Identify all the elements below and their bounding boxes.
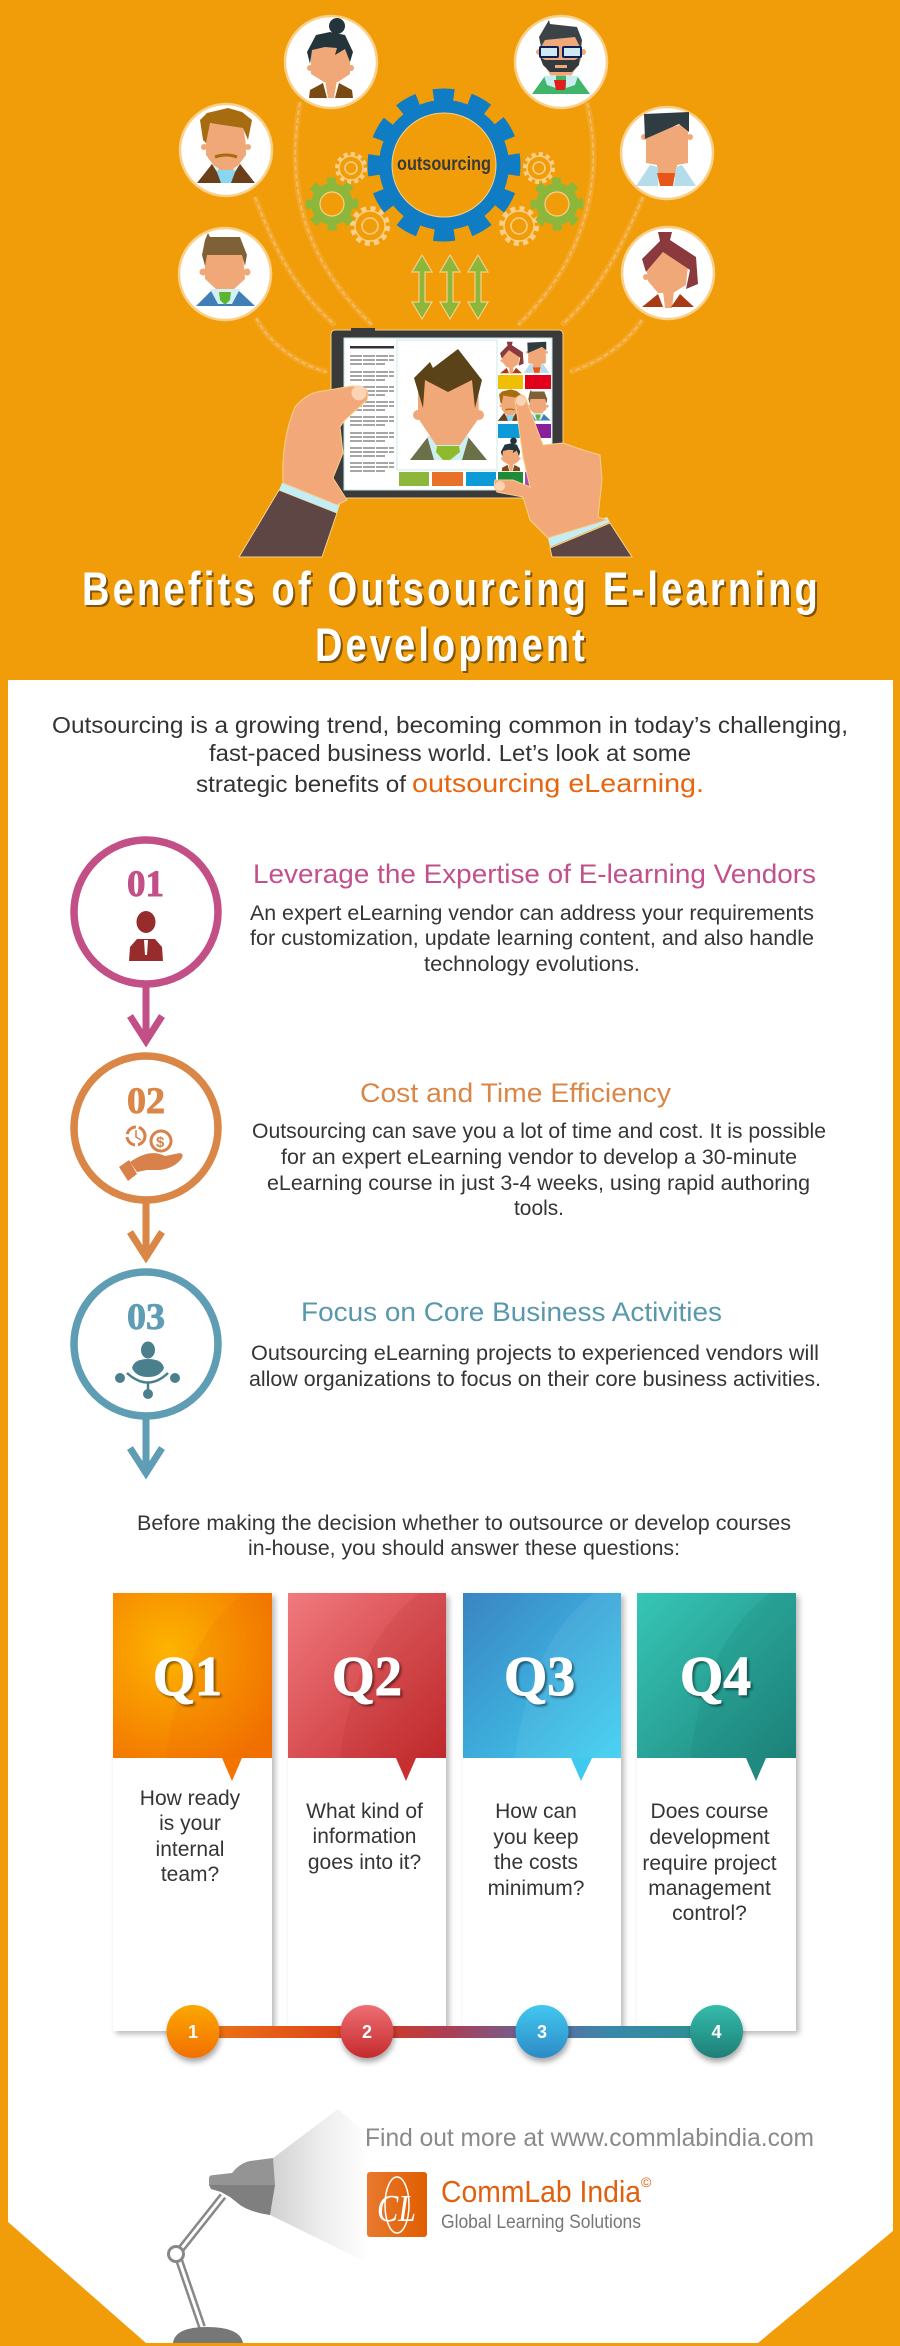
- step 01 body: [250, 902, 814, 976]
- card Q2: goes into it?: [308, 1851, 421, 1874]
- title: Development: [315, 618, 588, 671]
- intro text: Outsourcing is a growing trend, becoming common in today’s challenging,: [52, 712, 848, 738]
- logo: CommLab India: CommLab India: [441, 2174, 642, 2209]
- card Q3: minimum?: [488, 1877, 584, 1900]
- card Q2: Q2: [332, 1646, 402, 1708]
- step 01 body: An expert eLearning vendor can address your requirements: [250, 902, 814, 925]
- card Q4: [637, 1593, 796, 2031]
- small orange gears: [337, 154, 553, 244]
- intro text: strategic benefits of: [196, 771, 407, 797]
- step 01 body: technology evolutions.: [424, 953, 640, 976]
- hero illustration: [179, 16, 714, 557]
- card Q2: What kind of: [306, 1800, 423, 1823]
- green gear right: [534, 181, 580, 227]
- intro text: outsourcing eLearning.: [412, 768, 704, 798]
- step 03 number: 03: [127, 1297, 165, 1338]
- tablet mini portraits: [500, 342, 524, 374]
- card Q4: control?: [672, 1902, 747, 1925]
- step 03 body: [249, 1342, 821, 1391]
- step 01 number: 01: [127, 864, 164, 905]
- tablet colour tiles: [399, 472, 429, 486]
- person: man with moustache: [180, 104, 272, 196]
- icon: business person: [129, 911, 163, 961]
- step 03 body: allow organizations to focus on their core business activities.: [249, 1368, 821, 1391]
- tablet: [331, 328, 563, 498]
- timeline node 2: 2: [362, 2022, 372, 2042]
- timeline node 3: [516, 2005, 568, 2058]
- logo: CommLab India: CL: [377, 2188, 416, 2230]
- step 01 body: for customization, update learning content, and also handle: [250, 927, 814, 950]
- timeline node 4: 4: [711, 2022, 722, 2042]
- find out more text: Find out more at www.commlabindia.com: [365, 2124, 814, 2152]
- right hand: [494, 395, 632, 557]
- card Q1: is your: [159, 1812, 221, 1835]
- timeline node 3: 3: [537, 2022, 547, 2042]
- icon: person with network nodes: [115, 1342, 180, 1399]
- tablet main portrait: [410, 349, 487, 460]
- white content panel: [8, 680, 893, 2343]
- questions intro text: Before making the decision whether to outsource or develop courses: [137, 1512, 791, 1535]
- lamp light beam: [270, 2109, 368, 2263]
- questions intro text: [137, 1512, 791, 1560]
- card Q1: team?: [161, 1863, 219, 1886]
- dashed connector curves: [255, 102, 643, 372]
- card Q1: Q1: [153, 1646, 222, 1708]
- step 01: [74, 840, 816, 1041]
- step 03: [74, 1272, 821, 1473]
- step 02 ring and arrow: [74, 1056, 218, 1257]
- card Q3: Q3: [504, 1646, 575, 1708]
- timeline node 4: [690, 2005, 743, 2058]
- step 03 body: Outsourcing eLearning projects to experienced vendors will: [251, 1342, 819, 1365]
- timeline node 1: 1: [188, 2022, 198, 2042]
- person: man with glasses and beard: [515, 16, 607, 108]
- intro text: [52, 712, 848, 798]
- card Q1: [113, 1593, 272, 2031]
- card Q4: require project: [642, 1852, 777, 1875]
- person: man in blue suit: [179, 228, 271, 320]
- left hand: [239, 386, 368, 557]
- card Q2: information: [313, 1825, 416, 1848]
- card Q4: development: [649, 1826, 770, 1849]
- card Q1: How ready: [140, 1787, 241, 1810]
- logo: CommLab India: ©: [641, 2174, 652, 2190]
- card Q4: management: [648, 1877, 771, 1900]
- step 03 ring and arrow: [74, 1272, 218, 1473]
- step 02 body: for an expert eLearning vendor to develop a 30-minute: [281, 1146, 797, 1169]
- step 02 body: Outsourcing can save you a lot of time and cost. It is possible: [252, 1120, 826, 1143]
- double-headed green arrows: [412, 255, 488, 319]
- step 01 ring and arrow: [74, 840, 218, 1041]
- icon: hand with clock and coin: $: [156, 1134, 165, 1151]
- person: man with dark hair: [621, 107, 713, 199]
- card Q4: Q4: [680, 1646, 751, 1708]
- icon: hand with clock and coin: [119, 1127, 183, 1181]
- step 02 body: [252, 1120, 826, 1220]
- desk lamp: [168, 2109, 368, 2343]
- timeline node 2: [340, 2005, 394, 2058]
- card Q3: the costs: [494, 1851, 578, 1874]
- logo: CommLab India: [367, 2172, 652, 2237]
- card Q3: How can: [495, 1800, 577, 1823]
- numbered timeline: [166, 2005, 743, 2058]
- person: woman with bun: [285, 16, 377, 108]
- step 02 body: tools.: [514, 1197, 564, 1220]
- bottom corner triangles: [0, 2216, 900, 2346]
- big blue outsourcing gear: outsourcing: [397, 154, 491, 175]
- step 02 heading: Cost and Time Efficiency: [360, 1078, 672, 1108]
- step 01 heading: Leverage the Expertise of E-learning Vendors: [253, 859, 816, 889]
- card Q3: you keep: [493, 1826, 579, 1849]
- card Q2: [288, 1593, 446, 2031]
- title: [82, 562, 821, 671]
- questions intro text: in-house, you should answer these questions:: [248, 1537, 680, 1560]
- green gear left: [309, 181, 355, 227]
- card Q3: [463, 1593, 621, 2031]
- step 02 body: eLearning course in just 3-4 weeks, using rapid authoring: [267, 1172, 810, 1195]
- person: woman with red hair: [622, 227, 714, 319]
- step 02 number: 02: [127, 1081, 165, 1122]
- timeline node 1: [166, 2005, 220, 2058]
- logo: CommLab India: Global Learning Solutions: [441, 2212, 641, 2233]
- step 02: [74, 1056, 826, 1257]
- intro text: fast-paced business world. Let’s look at some: [209, 740, 691, 766]
- step 03 heading: Focus on Core Business Activities: [301, 1297, 722, 1327]
- card Q4: Does course: [651, 1800, 768, 1823]
- card Q1: internal: [156, 1838, 224, 1861]
- big blue outsourcing gear: [374, 94, 514, 236]
